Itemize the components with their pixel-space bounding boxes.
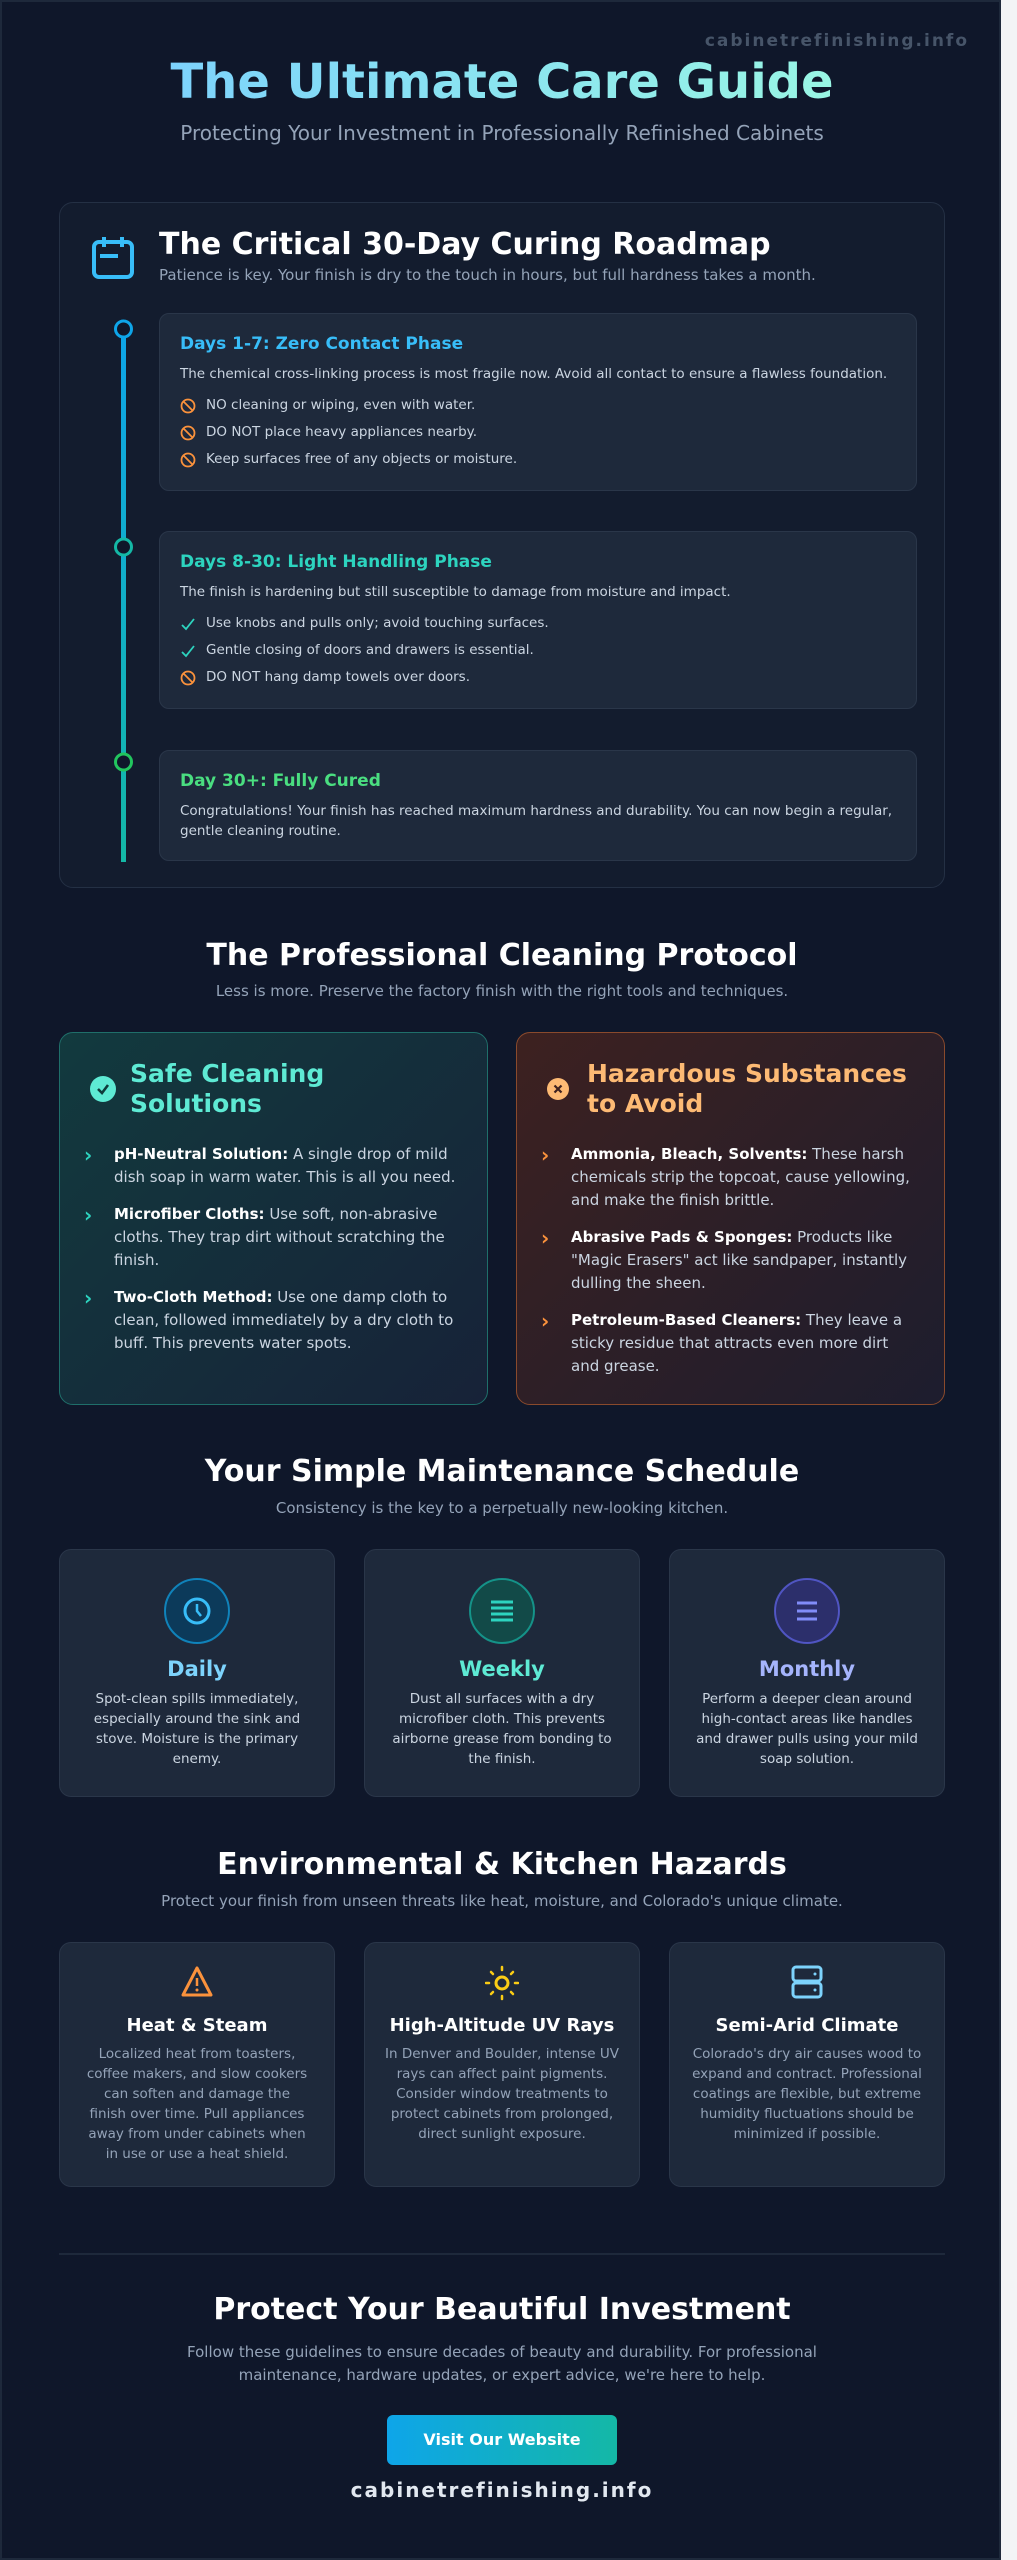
heading: protect investment: Protect Your Beautiful Investment [213,2292,791,2327]
phase 3 card: Day 30+: Fully Cured [180,771,381,791]
safe items: pH-Neutral Solution: A single drop of mild dish soap in warm water. This is all you need. [114,1145,455,1186]
phase 2 card [159,531,917,709]
icon: sun [485,1966,519,2000]
card: heat & steam: Localized heat from toasters, coffee makers, and slow cookers can soften and damage the finish over time. Pull appliances away from under cabinets when in use or use a heat shield. [87,2046,307,2162]
phase 2 card: The finish is hardening but still susceptible to damage from moisture and impact. [180,584,731,600]
closing paragraph: Follow these guidelines to ensure decades of beauty and durability. For professional maintenance, hardware updates, or expert advice, we're here to help. [187,2343,817,2384]
card: daily: Spot-clean spills immediately, especially around the sink and stove. Moisture is the primary enemy. [94,1691,300,1767]
button: visit website: Visit Our Website [423,2430,581,2449]
subheading: environmental hazards: Protect your finish from unseen threats like heat, moisture, and Colorado's unique climate. [161,1892,843,1910]
roadmap subheading: Patience is key. Your finish is dry to the touch in hours, but full hardness takes a month. [159,266,816,284]
subheading: maintenance schedule: Consistency is the key to a perpetually new-looking kitchen. [276,1499,728,1517]
card: monthly [669,1549,945,1797]
phase 1 card: The chemical cross-linking process is most fragile now. Avoid all contact to ensure a flawless foundation. [180,366,887,382]
subtitle: Protecting Your Investment in Professionally Refinished Cabinets [180,121,824,145]
phase 3 card: Congratulations! Your finish has reached maximum hardness and durability. You can now begin a regular, gentle cleaning routine. [180,803,892,839]
phase 2 card: Days 8-30: Light Handling Phase [180,552,492,572]
card: monthly: Monthly [759,1657,855,1681]
safe items: Two-Cloth Method: Use one damp cloth to clean, followed immediately by a dry cloth to buff. This prevents water spots. [114,1288,453,1352]
phase 1 card: DO NOT place heavy appliances nearby. [206,424,477,440]
card: daily [59,1549,335,1797]
subheading: cleaning protocol: Less is more. Preserve the factory finish with the right tools and techniques. [216,982,788,1000]
card: semi-arid climate: Semi-Arid Climate [716,2015,898,2036]
watermark: cabinetrefinishing.info [705,31,969,51]
card: weekly: Weekly [459,1657,545,1681]
icon: clock [164,1578,230,1644]
phase 1 card: Days 1-7: Zero Contact Phase [180,334,463,354]
safe heading: Safe Cleaning [130,1059,324,1088]
phase 1 card [159,313,917,491]
heading: cleaning protocol: The Professional Cleaning Protocol [206,938,798,973]
card: weekly [364,1549,640,1797]
hazard heading [547,1059,907,1118]
card: heat & steam [59,1942,335,2187]
phase 2 card: Gentle closing of doors and drawers is essential. [206,642,534,658]
icon: warning [182,1966,212,1996]
hazard items: Ammonia, Bleach, Solvents: These harsh chemicals strip the topcoat, cause yellowing, and make the finish brittle. [571,1145,910,1209]
phase 3 card [159,750,917,861]
card: semi-arid climate: Colorado's dry air causes wood to expand and contract. Professional coatings are flexible, but extreme humidity fluctuations should be minimized if possible. [692,2046,922,2142]
icon: lines teal [469,1578,535,1644]
hazard items: Abrasive Pads & Sponges: Products like "Magic Erasers" act like sandpaper, instantly dulling the sheen. [571,1228,907,1292]
panel: curing roadmap [59,202,945,888]
card: heat & steam: Heat & Steam [127,2015,267,2036]
safe items [86,1145,455,1352]
hazard items: Petroleum-Based Cleaners: They leave a sticky residue that attracts even more dirt and grease. [571,1311,902,1375]
card: UV rays [364,1942,640,2187]
phase 2 card: Use knobs and pulls only; avoid touching surfaces. [206,615,549,631]
hazard heading: Hazardous Substances [587,1059,907,1088]
card: UV rays: In Denver and Boulder, intense UV rays can affect paint pigments. Consider window treatments to protect cabinets from prolonged, direct sunlight exposure. [385,2046,619,2142]
button: visit website [387,2415,617,2465]
card: UV rays: High-Altitude UV Rays [390,2015,614,2036]
phase 1 card: NO cleaning or wiping, even with water. [206,397,475,413]
icon: server [792,1966,822,1998]
roadmap heading: The Critical 30-Day Curing Roadmap [159,227,771,262]
safe heading: Solutions [130,1089,262,1118]
card: monthly: Perform a deeper clean around high-contact areas like handles and drawer pulls using your mild soap solution. [696,1691,918,1767]
footer url: cabinetrefinishing.info [351,2478,653,2502]
panel: hazardous substances [516,1032,945,1405]
phase 1 card: Keep surfaces free of any objects or moisture. [206,451,517,467]
hazard heading: to Avoid [587,1089,703,1118]
panel: safe cleaning [59,1032,488,1405]
phase 2 card: DO NOT hang damp towels over doors. [206,669,470,685]
timeline line [114,320,133,862]
card: daily: Daily [167,1657,227,1681]
title: The Ultimate Care Guide [170,54,834,110]
safe items: Microfiber Cloths: Use soft, non-abrasive cloths. They trap dirt without scratching the finish. [114,1205,445,1269]
icon: lines purple [774,1578,840,1644]
heading: environmental hazards: Environmental & Kitchen Hazards [217,1847,787,1882]
card: semi-arid climate [669,1942,945,2187]
heading: maintenance schedule: Your Simple Maintenance Schedule [205,1454,799,1489]
icon: calendar [92,237,134,279]
safe heading [90,1059,324,1118]
card: weekly: Dust all surfaces with a dry microfiber cloth. This prevents airborne grease from bonding to the finish. [392,1691,612,1767]
hazard items [542,1145,910,1375]
